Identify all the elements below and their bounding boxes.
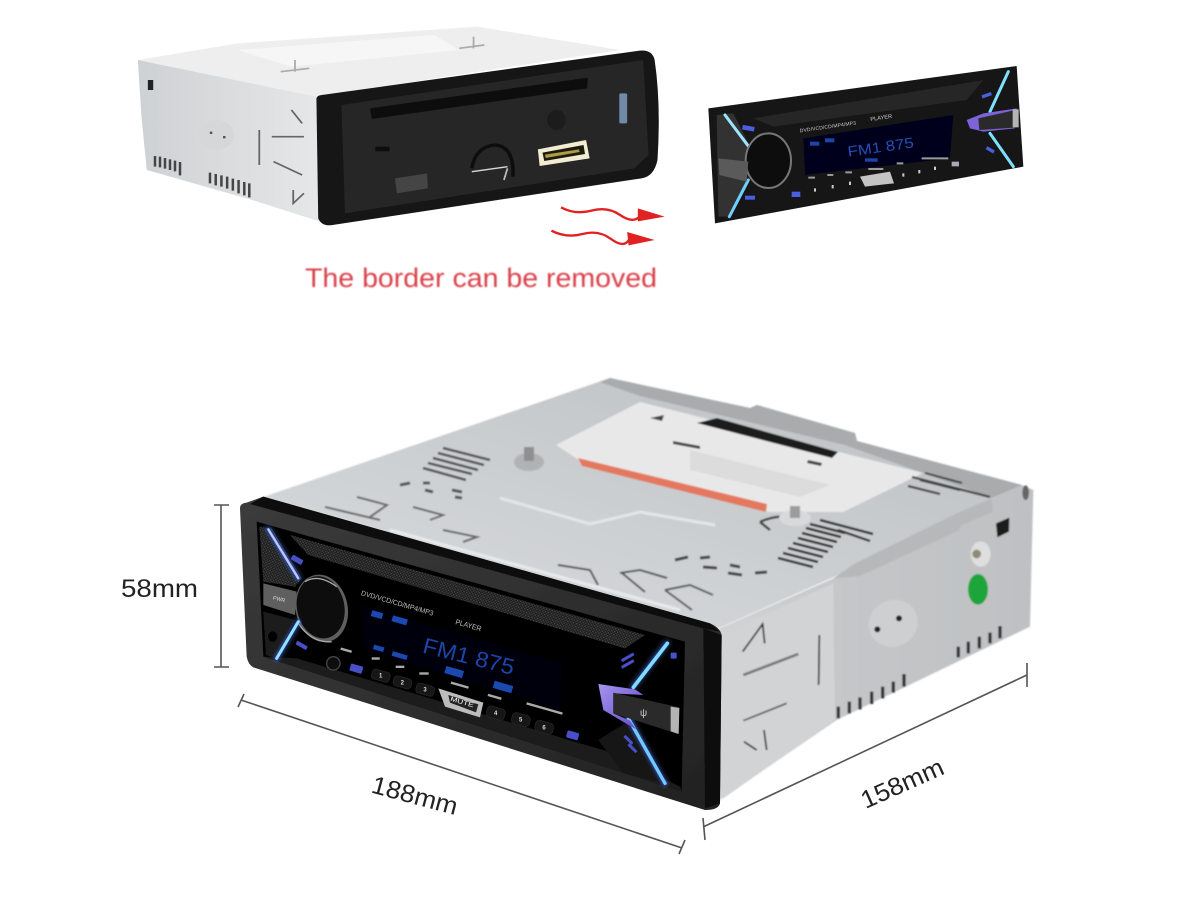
power button: PWR	[272, 595, 286, 604]
dimension: height 58mm	[121, 505, 229, 667]
left carbon panel	[717, 113, 750, 217]
power button	[263, 583, 297, 615]
right lower dark area	[598, 718, 665, 783]
beam upper right	[633, 643, 667, 687]
bezel top edge	[250, 497, 720, 632]
screw recess	[547, 110, 566, 130]
front bracket panel	[723, 583, 835, 798]
white small key labels	[340, 647, 563, 715]
connector socket	[538, 140, 590, 166]
disc slot	[370, 78, 588, 119]
preset digits: 3	[423, 688, 427, 694]
player text: PLAYER	[454, 617, 483, 633]
USB key with violet glow	[967, 108, 1019, 132]
label red strip	[578, 458, 767, 512]
side ledge	[833, 498, 993, 578]
rear corner bolt	[1022, 485, 1029, 500]
small left hole	[375, 147, 390, 151]
beam upper left	[268, 529, 298, 578]
side vents and holes	[155, 110, 304, 203]
preset digits: 1	[379, 674, 383, 680]
mute button	[438, 688, 483, 717]
label grey text block	[690, 450, 830, 497]
frequency readout: FM1 875	[847, 136, 915, 161]
depth line	[703, 663, 1027, 840]
height line	[214, 505, 229, 667]
brand label: DVD/VCD/CD/MP4/MP3	[799, 120, 857, 134]
display	[803, 115, 953, 175]
specification label	[556, 402, 923, 512]
light beams	[268, 529, 667, 783]
blue glow halo	[268, 529, 667, 783]
side panel	[719, 485, 1033, 800]
knob	[746, 133, 791, 188]
preset digits: 2	[401, 680, 405, 686]
label black title bar	[697, 418, 838, 458]
preset keys	[371, 668, 555, 735]
chassis top face	[138, 27, 620, 97]
USB key and violet glow: ψ	[640, 708, 647, 719]
rear-right vent slots	[908, 473, 990, 497]
arrows: border removal direction	[551, 207, 665, 245]
top-face vents and embossing	[325, 448, 990, 610]
height label: 58mm	[121, 575, 198, 603]
dimension: depth 158mm	[703, 663, 1027, 840]
photo: radio chassis with border removed	[138, 27, 659, 225]
USB key and violet glow	[598, 684, 679, 734]
side cut lines	[743, 624, 819, 750]
reset hole	[268, 631, 277, 642]
front plate inner recess	[341, 60, 649, 213]
top screws	[514, 447, 811, 526]
top screws	[281, 37, 484, 72]
side vent holes	[838, 626, 1000, 718]
chassis side face	[138, 60, 320, 222]
preset digits: 5	[519, 718, 523, 724]
mute button	[860, 172, 894, 187]
left embossed arrows	[325, 497, 477, 542]
upper red arrow	[561, 207, 665, 221]
aux jack	[327, 657, 340, 670]
preset digits: 6	[542, 725, 546, 731]
lower dark strip	[263, 657, 682, 792]
preset digits	[379, 674, 546, 731]
light beams	[725, 72, 1013, 217]
screw bracket line	[760, 516, 805, 530]
faint top label	[238, 35, 459, 67]
bezel right edge	[703, 628, 722, 808]
blue function keys	[291, 555, 677, 753]
label small marks	[650, 415, 822, 466]
preset keys row	[815, 167, 935, 192]
dash marks right	[675, 557, 767, 575]
player label: PLAYER	[870, 114, 893, 123]
dimension: width 188mm	[238, 694, 685, 854]
width label: 188mm	[369, 771, 461, 821]
small switch	[395, 173, 428, 193]
frequency readout: FM1 875	[420, 633, 517, 680]
display window	[362, 605, 562, 710]
embossed plateau outline	[390, 530, 680, 610]
black square hole	[996, 518, 1009, 537]
side screw holes	[211, 132, 224, 138]
chassis side face and details	[719, 485, 1033, 800]
blue key labels	[742, 92, 995, 200]
rotary cut-out	[472, 145, 513, 180]
inner black face	[257, 522, 685, 792]
ground screw	[971, 541, 991, 567]
dash marks left	[400, 483, 462, 498]
panel body	[708, 66, 1023, 223]
carbon top strip	[290, 535, 645, 648]
front panel of assembled radio	[240, 497, 722, 810]
right embossed arrows	[558, 565, 713, 610]
key captions row	[808, 158, 948, 178]
volume knob	[289, 570, 354, 647]
power button	[718, 158, 748, 182]
photo: border frame front panel	[708, 66, 1023, 223]
side screw holes	[874, 615, 902, 632]
front-right vent slots	[778, 520, 873, 567]
rear edge band	[600, 378, 1022, 498]
lower red arrow	[551, 231, 655, 245]
side square hole	[148, 80, 153, 90]
beam lower right	[628, 718, 665, 783]
beam lower left	[277, 622, 298, 658]
front-left vent slots	[423, 448, 490, 480]
side oval recess	[860, 591, 927, 656]
USB port glow	[619, 93, 627, 123]
left lower panel	[263, 612, 295, 658]
depth label: 158mm	[857, 753, 948, 815]
width line	[238, 694, 685, 854]
outer bezel	[240, 497, 722, 810]
model text: DVD/VCD/CD/MP4/MP3	[360, 590, 434, 618]
caption: the border can be removed: The border can be removed	[305, 263, 657, 293]
side oval recess	[199, 120, 234, 150]
photo: assembled radio chassis with dimensions	[263, 378, 1033, 800]
front plate	[316, 51, 659, 225]
chassis top face	[263, 378, 1022, 628]
mute button: MUTE	[449, 696, 474, 709]
green sticker	[968, 574, 988, 605]
preset digits: 4	[494, 711, 498, 717]
display blue indicators	[371, 610, 513, 693]
left carbon panel	[259, 527, 302, 587]
carbon strip	[753, 80, 983, 127]
